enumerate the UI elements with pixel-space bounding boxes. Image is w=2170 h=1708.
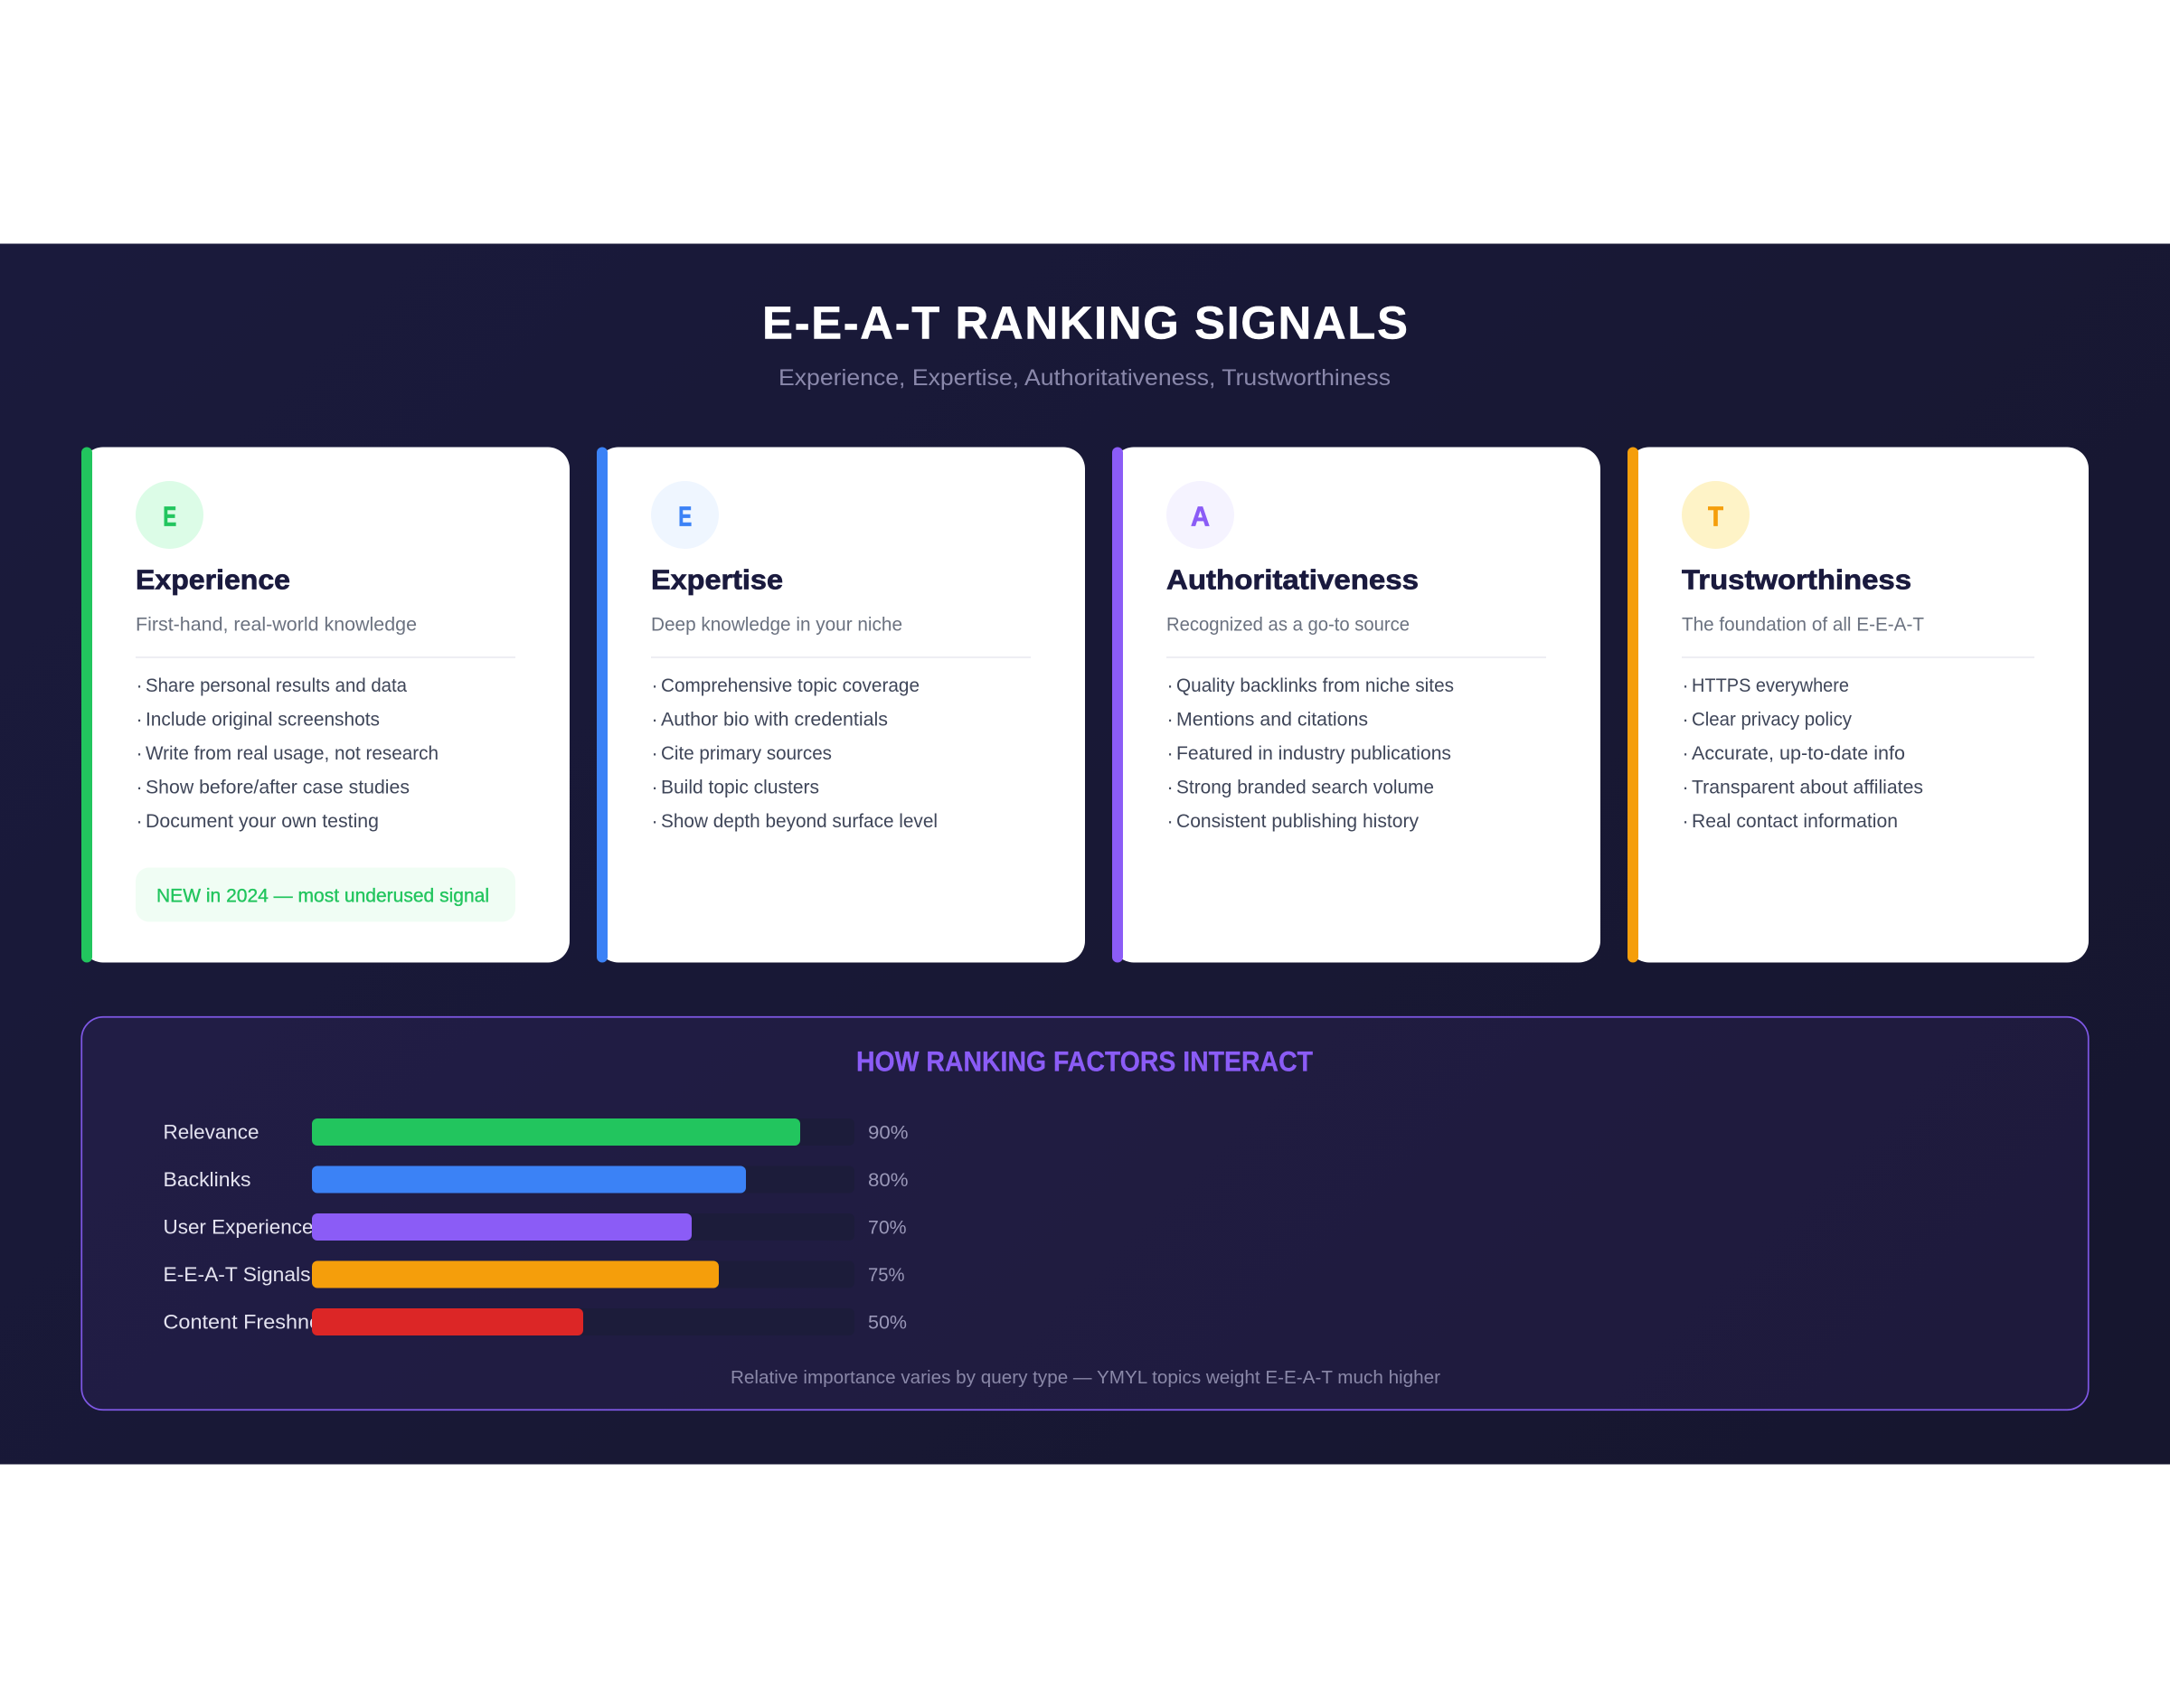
bullet list: Trustworthiness: · <box>1682 810 1689 832</box>
icon: letter T badge <box>1682 481 1750 549</box>
accent bar: amber <box>1628 447 1638 962</box>
panel heading: HOW RANKING FACTORS INTERACT <box>856 1044 1313 1077</box>
bar row: E-E-A-T Signals 75% <box>163 1260 904 1288</box>
bullet list: Experience: · <box>136 776 143 797</box>
bar row: User Experience 70%: 70% <box>868 1217 907 1239</box>
bullet list: Experience <box>136 675 439 832</box>
bullet list: Experience: · <box>136 810 143 832</box>
accent bar: purple <box>1112 447 1123 962</box>
icon: letter A badge <box>1166 481 1234 549</box>
bullet list: Authoritativeness: · <box>1166 675 1174 696</box>
bullet list: Experience: · <box>136 709 143 731</box>
bar row: E-E-A-T Signals 75%: E-E-A-T Signals <box>163 1263 311 1286</box>
bullet list: Experience: · <box>136 742 143 764</box>
title: E-E-A-T RANKING SIGNALS <box>762 297 1408 349</box>
accent bar: blue <box>597 447 608 962</box>
bullet list: Trustworthiness: · <box>1682 709 1689 731</box>
bar row: Backlinks 80% <box>163 1166 908 1194</box>
bullet list: Trustworthiness: Accurate, up-to-date info <box>1692 742 1905 764</box>
description: Trustworthiness: The foundation of all E-E-A-T <box>1682 615 1924 635</box>
icon: letter E badge <box>136 481 203 549</box>
bullet list: Expertise: · <box>651 709 658 731</box>
bullet list: Authoritativeness: Quality backlinks from niche sites <box>1176 675 1454 696</box>
callout: new in 2024 <box>136 868 515 922</box>
dark background section <box>0 244 2170 1465</box>
bullet list: Expertise: · <box>651 675 658 696</box>
description: Authoritativeness: Recognized as a go-to source <box>1166 615 1410 635</box>
accent bar: green <box>81 447 92 962</box>
bullet list: Experience: · <box>136 675 143 696</box>
bar row: Content Freshness 50%: Content Freshness <box>163 1311 342 1333</box>
bar row: Backlinks 80%: Backlinks <box>163 1168 251 1191</box>
bullet list: Experience: Show before/after case studies <box>146 776 410 797</box>
bullet list: Expertise: · <box>651 810 658 832</box>
bar row: Backlinks 80%: 80% <box>868 1170 908 1191</box>
icon: letter T badge: T <box>1708 501 1723 533</box>
description: Expertise: Deep knowledge in your niche <box>651 615 902 635</box>
panel: Trustworthiness card <box>1628 447 2089 962</box>
bar row: Relevance 90%: 90% <box>868 1123 908 1143</box>
bullet list: Expertise: Author bio with credentials <box>661 709 888 731</box>
callout: new in 2024: NEW in 2024 — most underused signal <box>156 886 489 906</box>
bullet list: Authoritativeness: Mentions and citations <box>1176 709 1368 731</box>
panel: how ranking factors interact <box>81 1017 2089 1410</box>
bullet list: Trustworthiness: · <box>1682 776 1689 797</box>
bullet list: Expertise: Build topic clusters <box>661 776 819 797</box>
panel: Expertise card <box>597 447 1085 962</box>
bullet list: Expertise: · <box>651 776 658 797</box>
bar row: Relevance 90%: Relevance <box>163 1121 259 1143</box>
bullet list: Experience: Document your own testing <box>146 810 379 832</box>
description: Experience: First-hand, real-world knowledge <box>136 615 417 635</box>
bullet list: Authoritativeness: Featured in industry publications <box>1176 742 1451 764</box>
bullet list: Trustworthiness: Transparent about affiliates <box>1692 776 1923 797</box>
icon: letter A badge: A <box>1191 501 1210 533</box>
heading: Trustworthiness: Trustworthiness <box>1682 564 1911 596</box>
bar row: E-E-A-T Signals 75%: 75% <box>868 1265 904 1286</box>
panel: Authoritativeness card <box>1112 447 1600 962</box>
bullet list: Experience: Include original screenshots <box>146 709 380 731</box>
bar row: User Experience 70%: User Experience <box>163 1215 313 1239</box>
heading: Expertise: Expertise <box>651 564 783 596</box>
bullet list: Trustworthiness: HTTPS everywhere <box>1692 675 1849 696</box>
icon: letter E badge <box>651 481 719 549</box>
bullet list: Authoritativeness: Strong branded search volume <box>1176 776 1434 797</box>
bullet list: Expertise: Show depth beyond surface level <box>661 810 938 832</box>
bullet list: Experience: Write from real usage, not research <box>146 742 439 764</box>
bullet list: Trustworthiness: Real contact information <box>1692 810 1898 832</box>
heading: Experience: Experience <box>136 564 290 596</box>
bullet list: Authoritativeness: · <box>1166 810 1174 832</box>
bullet list: Authoritativeness: Consistent publishing history <box>1176 810 1419 832</box>
icon: letter E badge: E <box>163 501 176 533</box>
bullet list: Trustworthiness <box>1682 675 1923 832</box>
bar chart <box>163 1118 908 1335</box>
bullet list: Expertise: Comprehensive topic coverage <box>661 675 920 696</box>
bullet list: Experience: Share personal results and data <box>146 675 407 696</box>
bullet list: Expertise: Cite primary sources <box>661 742 832 764</box>
bullet list: Trustworthiness: Clear privacy policy <box>1692 709 1852 731</box>
icon: letter E badge: E <box>678 501 692 533</box>
bullet list: Authoritativeness: · <box>1166 709 1174 731</box>
bar row: User Experience 70% <box>163 1213 907 1241</box>
bar row: Content Freshness 50%: 50% <box>868 1313 907 1333</box>
bullet list: Authoritativeness: · <box>1166 742 1174 764</box>
bullet list: Trustworthiness: · <box>1682 742 1689 764</box>
heading: Authoritativeness: Authoritativeness <box>1166 564 1419 596</box>
subtitle: Experience, Expertise, Authoritativeness, Trustworthiness <box>778 365 1391 391</box>
panel: Experience card <box>81 447 570 962</box>
bar row: Relevance 90% <box>163 1118 908 1146</box>
bullet list: Authoritativeness: · <box>1166 776 1174 797</box>
bullet list: Expertise <box>651 675 938 832</box>
bullet list: Expertise: · <box>651 742 658 764</box>
bullet list: Trustworthiness: · <box>1682 675 1689 696</box>
footnote: Relative importance varies by query type — YMYL topics weight E-E-A-T much higher <box>731 1368 1440 1388</box>
bullet list: Authoritativeness <box>1166 675 1454 832</box>
bar row: Content Freshness 50% <box>163 1308 907 1335</box>
